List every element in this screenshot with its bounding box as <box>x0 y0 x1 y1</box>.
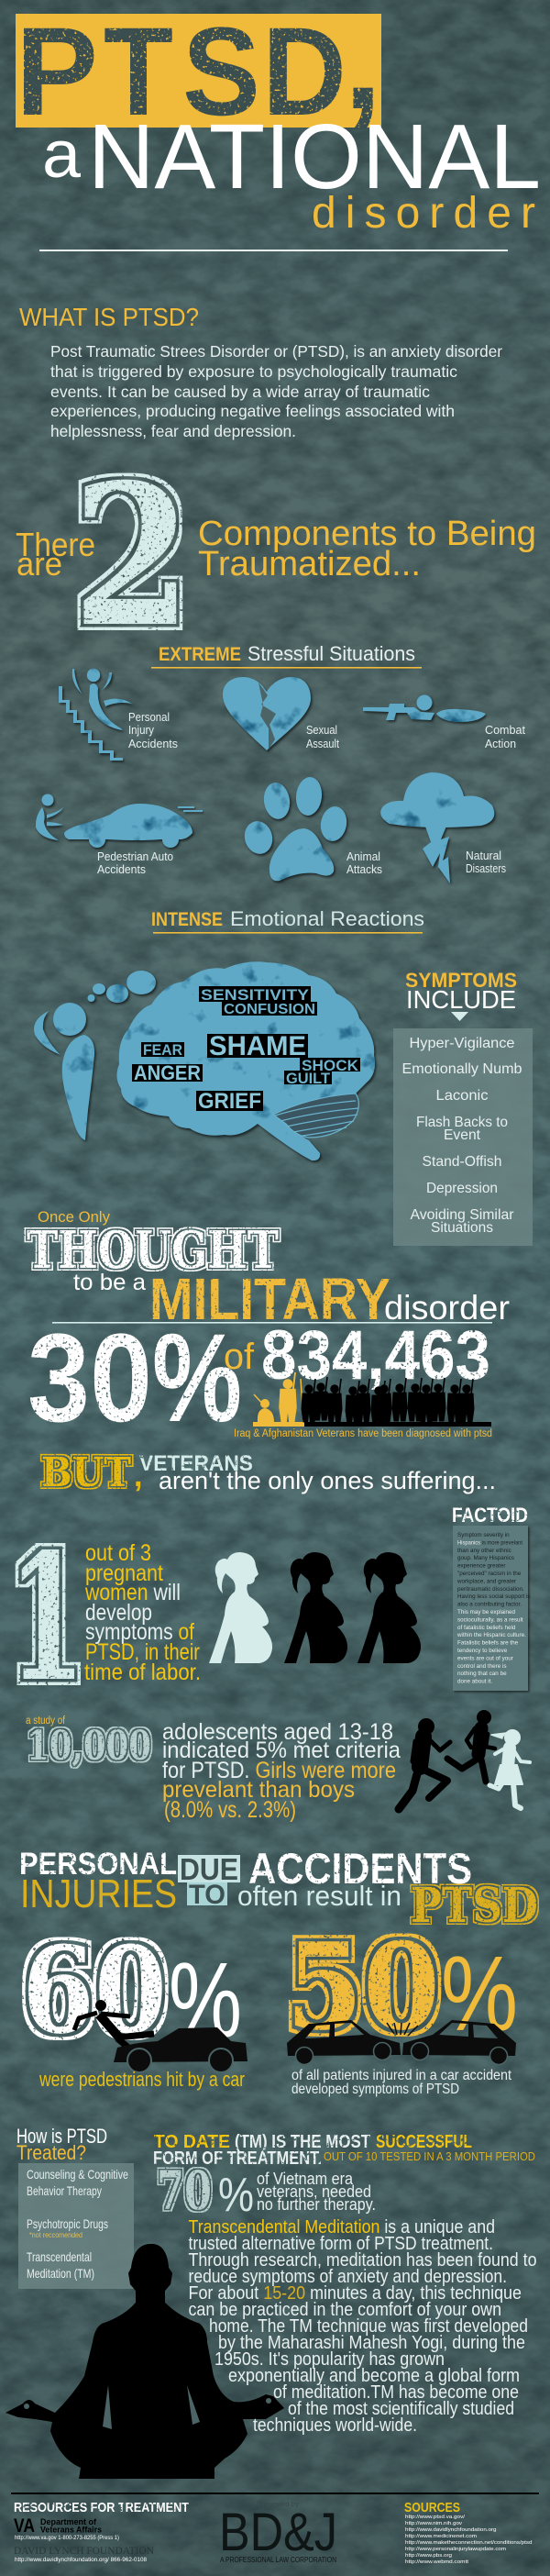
heading: there are 2 components: There <box>16 526 95 563</box>
icon: animal attacks: Animal <box>346 850 380 863</box>
stat: 50 percent: 50 <box>286 1916 440 2057</box>
icon: pedestrian auto accidents: Pedestrian Auto <box>97 850 173 863</box>
panel: treatments: Behavior Therapy <box>27 2183 102 2198</box>
title: disorder: disorder <box>312 189 535 238</box>
stat: 1 out of 3 pregnant women <box>8 1516 201 1720</box>
heading: there are 2 components: Components to Being <box>198 515 536 553</box>
icon: pedestrian auto accidents: Accidents <box>97 863 146 876</box>
icon: natural disasters <box>380 772 506 883</box>
panel: treatments: *not reccomended <box>29 2231 82 2239</box>
text block: transcendental meditation: can be practiced in the comfort of your own <box>189 2300 501 2320</box>
stat: study of 10,000 adolescents: a study of <box>26 1715 66 1727</box>
stat: 30 percent of 834,463: % <box>152 1308 242 1449</box>
panel: symptoms list: Stand-Offish <box>422 1154 502 1170</box>
heading: personal injuries due to accidents often result in PTSD: ACCIDENTS <box>248 1844 472 1893</box>
text block: transcendental meditation: reduce symptoms of anxiety and depression. <box>189 2267 507 2287</box>
heading: what is PTSD: WHAT IS PTSD? <box>19 303 199 331</box>
heading: to date TM is most successful <box>153 2132 472 2169</box>
title: PTSD on yellow block: T <box>104 2 173 142</box>
text block: transcendental meditation: of the most scientifically studied <box>288 2399 514 2419</box>
heading: there are 2 components: Traumatized... <box>198 545 421 583</box>
stat: 70 percent: veterans, needed <box>257 2182 371 2201</box>
icon: sexual assault: Sexual <box>306 724 337 737</box>
panel: factoid: peritraumatic dissociation. <box>457 1586 524 1593</box>
brain label: shock: SHOCK <box>302 1057 359 1074</box>
icon: three pregnant women <box>209 1552 421 1663</box>
footer: sources: http://www.pbs.org <box>405 2553 452 2559</box>
stat: study of 10,000 adolescents: indicated 5% met criteria <box>162 1738 401 1763</box>
panel: factoid <box>453 1526 530 1691</box>
icon: two cars crashing <box>287 2020 516 2064</box>
panel: treatments: Counseling & Cognitive <box>27 2167 128 2182</box>
heading: how is PTSD treated <box>16 2125 107 2164</box>
heading: once only thought to be a military disorder: Once Only <box>38 1208 110 1226</box>
heading: intense emotional reactions <box>151 907 424 934</box>
stat: 1 out of 3 pregnant women: out of 3 <box>85 1540 151 1566</box>
icon: combat action: Action <box>485 738 516 750</box>
panel: factoid: Symptom severity in <box>457 1532 510 1538</box>
heading: but veterans aren't the only ones suffering: BUT <box>41 1449 131 1496</box>
heading: but veterans aren't the only ones suffering: aren't the only ones suffering... <box>159 1467 496 1494</box>
panel: symptoms list: Laconic <box>436 1088 488 1104</box>
brain label: fear: FEAR <box>143 1041 182 1059</box>
heading: personal injuries due to accidents often result in PTSD: PERSONAL <box>19 1847 177 1882</box>
panel: factoid: Fatalistic beliefs are the <box>457 1640 519 1647</box>
heading: to date TM is most successful: SUCCESSFUL <box>376 2132 472 2152</box>
icon: personal injury accidents: Accidents <box>128 738 178 750</box>
panel: factoid: done about it. <box>457 1679 492 1685</box>
heading: symptoms include <box>405 969 517 1021</box>
heading: personal injuries due to accidents often result in PTSD: DUE <box>180 1852 238 1886</box>
heading: personal injuries due to accidents often result in PTSD <box>19 1844 538 1934</box>
heading: once only thought to be a military disorder: disorder <box>384 1289 510 1327</box>
brain label: confusion: CONFUSION <box>224 1002 315 1017</box>
stat: 1 out of 3 pregnant women: time of labor. <box>84 1660 201 1685</box>
text block: definition <box>50 342 502 440</box>
footer: presented by BD&J: BD&J <box>219 2503 337 2562</box>
icon: pedestrian auto accidents <box>36 794 203 876</box>
panel: treatments: Transcendental <box>27 2249 92 2264</box>
heading: once only thought to be a military disorder: MILITARY <box>149 1266 390 1332</box>
brain: cerebellum <box>273 1094 358 1138</box>
text block: transcendental meditation: For about 15-20 minutes a day, this technique <box>189 2283 522 2304</box>
heading: extreme stressful situations <box>151 642 422 669</box>
title: a NATIONAL: a <box>42 118 82 192</box>
stat: 1 out of 3 pregnant women: pregnant <box>85 1560 163 1586</box>
stat: study of 10,000 adolescents: 10,000 <box>27 1723 151 1770</box>
text block: transcendental meditation <box>189 2217 537 2436</box>
footer: presented by BD&J: Presented by <box>257 2500 299 2508</box>
stat: 1 out of 3 pregnant women: 1 <box>8 1516 85 1720</box>
heading: but veterans aren't the only ones suffering <box>41 1449 496 1496</box>
footer: resources for treatment <box>14 2500 189 2563</box>
text block: definition: events. It can be caused by a wide array of traumatic <box>50 383 430 401</box>
panel: treatments: Psychotropic Drugs <box>27 2216 108 2231</box>
panel: factoid: of fatalistic beliefs held <box>457 1625 516 1631</box>
heading: personal injuries due to accidents often result in PTSD: TO <box>189 1880 226 1910</box>
panel: factoid: within the Hispanic culture. <box>456 1632 526 1638</box>
footer: presented by BD&J: A PROFESSIONAL LAW CORPORATION <box>220 2555 336 2564</box>
stat: 1 out of 3 pregnant women: women will <box>84 1580 181 1605</box>
stat: 1 out of 3 pregnant women: symptoms of <box>85 1619 194 1645</box>
stat: study of 10,000 adolescents: (8.0% vs. 2.3%) <box>164 1797 296 1823</box>
panel: symptoms list: Event <box>444 1127 481 1143</box>
runner 1 <box>399 1718 450 1809</box>
panel: factoid: socioculturally, as a result <box>457 1616 523 1623</box>
heading: how is PTSD treated: How is PTSD <box>16 2125 107 2148</box>
stat: 1 out of 3 pregnant women: PTSD, in their <box>85 1639 200 1665</box>
panel: factoid: events are out of your <box>457 1655 513 1661</box>
stat: 70 percent: 70 <box>157 2160 212 2222</box>
stat: study of 10,000 adolescents: for PTSD. Girls were more <box>162 1758 396 1783</box>
footer: sources: http://www.personalinjurylawupdate.com <box>405 2547 506 2552</box>
panel: factoid: control and there is <box>457 1663 507 1670</box>
footer: sources <box>404 2500 532 2565</box>
panel: factoid: goup. Many Hispanics <box>457 1555 514 1561</box>
title: PTSD on yellow block <box>16 0 382 142</box>
icon: sexual assault <box>223 677 339 750</box>
stat: 70 percent: % <box>218 2169 254 2222</box>
heading: personal injuries due to accidents often result in PTSD: often result in <box>237 1880 402 1912</box>
stat: 70 percent: no further therapy. <box>257 2195 376 2214</box>
caption: car accident patients: of all patients injured in a car accident <box>292 2068 512 2083</box>
stat: study of 10,000 adolescents <box>26 1715 401 1823</box>
icon: natural disasters: Disasters <box>466 862 506 875</box>
icon: running children <box>399 1710 530 1809</box>
caption: car accident patients <box>292 2068 512 2097</box>
icon: meditating silhouette <box>6 2244 284 2479</box>
panel: treatments: Meditation (TM) <box>27 2266 94 2281</box>
stat: 60 percent: 60 <box>22 1920 167 2060</box>
icon: sexual assault: Assault <box>306 738 339 750</box>
panel: symptoms list: Emotionally Numb <box>402 1061 522 1077</box>
logo: veterans affairs: VA <box>14 2515 35 2537</box>
icon: animal attacks <box>241 776 382 881</box>
logo: veterans affairs: Veterans Affairs <box>40 2525 102 2536</box>
panel: factoid: experience greater <box>457 1563 506 1570</box>
footer: resources for treatment: RESOURCES FOR TREATMENT <box>14 2500 189 2515</box>
runner 3: girl <box>490 1729 530 1808</box>
stat: 70 percent: of Vietnam era <box>257 2170 354 2188</box>
logo: veterans affairs: Department of <box>40 2517 97 2527</box>
footer: resources for treatment: DAVID LYNCH FOUNDATION <box>14 2544 154 2557</box>
stat: 50 percent: % <box>441 1934 518 2053</box>
footer: sources: http://www.ptsd.va.gov/ <box>405 2515 466 2520</box>
text block: transcendental meditation: 1950s. It's popularity has grown <box>214 2349 445 2370</box>
footer: sources: http://www.medicinenet.com <box>405 2534 477 2539</box>
panel: factoid: also a contributing factor. <box>457 1602 522 1608</box>
panel: factoid: nothing that can be <box>457 1671 507 1677</box>
brain label: guilt: GUILT <box>286 1070 331 1087</box>
heading: how is PTSD treated: Treated? <box>16 2141 86 2164</box>
stat: 1 out of 3 pregnant women: develop <box>85 1600 152 1626</box>
stat: 60 percent: % <box>169 1940 242 2060</box>
brain label: sensitivity: SENSITIVITY <box>201 986 310 1004</box>
heading: extreme stressful situations: EXTREME <box>159 644 241 665</box>
heading: to date TM is most successful: TO DATE <box>154 2132 230 2152</box>
runner 2 <box>447 1710 495 1782</box>
stat: 30 percent of 834,463: 30 <box>28 1308 152 1449</box>
stat: 30 percent of 834,463: of <box>224 1337 255 1377</box>
text block: transcendental meditation: trusted alternative form of PTSD treatment. <box>189 2234 493 2254</box>
logo: veterans affairs <box>14 2515 102 2537</box>
icon: natural disasters: Natural <box>466 849 501 862</box>
panel: symptoms list: Situations <box>431 1220 493 1236</box>
footer: sources: http://www.webmd.comtt <box>405 2559 469 2565</box>
footer: sources: SOURCES <box>404 2500 460 2515</box>
icon: animal attacks: Attacks <box>346 863 382 876</box>
icon: pedestrian hit by car <box>74 2000 248 2072</box>
icon: personal injury accidents <box>59 669 178 761</box>
panel: symptoms list <box>393 1028 533 1246</box>
panel: symptoms list: Hyper-Vigilance <box>409 1036 515 1051</box>
footer: sources: http://www.davidlynchfoundation.org <box>405 2527 497 2533</box>
footer: sources: http://www.maketheconnection.net/conditions/ptsd <box>405 2540 532 2546</box>
caption: car accident patients: developed symptoms of PTSD <box>292 2082 459 2097</box>
stat: 30 percent of 834,463: 834,463 <box>261 1316 490 1394</box>
silhouette head over panel <box>102 2244 200 2324</box>
title: PTSD on yellow block: D <box>262 2 346 142</box>
brain label: shame: SHAME <box>209 1031 306 1061</box>
brain with emotion labels <box>116 961 375 1160</box>
icon: combat action: Combat <box>485 724 526 737</box>
heading: once only thought to be a military disorder: to be a <box>73 1270 146 1295</box>
heading: symptoms include: INCLUDE <box>406 985 516 1014</box>
caption: veterans diagnosed: Iraq & Afghanistan Veterans have been diagnosed with ptsd <box>234 1428 492 1439</box>
panel: symptoms list: Depression <box>426 1181 498 1196</box>
factoid heading: FACTOID <box>452 1504 528 1527</box>
caption: pedestrians: were pedestrians hit by a car <box>38 2068 245 2091</box>
panel: factoid: "perceived" racism in the <box>457 1571 522 1577</box>
title: PTSD on yellow block: P <box>16 2 98 142</box>
text block: definition: helplessness, fear and depression. <box>50 422 296 440</box>
panel: symptoms list: Avoiding Similar <box>411 1207 514 1223</box>
text block: definition: that is triggered by exposure to psychologically traumatic <box>50 362 457 381</box>
text block: definition: Post Traumatic Strees Disorder or (PTSD), is an anxiety disorder <box>50 342 502 361</box>
heading: but veterans aren't the only ones suffering: VETERANS <box>139 1451 253 1476</box>
heading: once only thought to be a military disorder <box>27 1208 510 1332</box>
stat: study of 10,000 adolescents: adolescents aged 13-18 <box>162 1719 393 1745</box>
heading: personal injuries due to accidents often result in PTSD: INJURIES <box>20 1871 177 1916</box>
title: PTSD on yellow block: S <box>182 2 260 142</box>
heading: to date TM is most successful: (TM) IS THE MOST <box>235 2132 370 2152</box>
brain label: anger: ANGER <box>134 1061 201 1084</box>
text block: transcendental meditation: Transcendental Meditation is a unique and <box>189 2217 495 2237</box>
icon: personal injury accidents: Injury <box>128 724 155 737</box>
text block: transcendental meditation: techniques world-wide. <box>253 2415 417 2436</box>
title: a NATIONAL: NATIONAL <box>88 105 541 208</box>
panel: factoid: Having less social support is <box>457 1593 530 1600</box>
text block: definition: experiences, producing negative feelings associated with <box>50 402 455 420</box>
stat: study of 10,000 adolescents: prevelant than boys <box>162 1777 355 1803</box>
heading: intense emotional reactions: INTENSE <box>151 909 223 930</box>
icon: person thinking <box>34 971 156 1140</box>
stat: 30 percent of 834,463 <box>28 1308 490 1449</box>
heading: symptoms include: SYMPTOMS <box>405 969 517 992</box>
heading: there are 2 components <box>16 441 536 670</box>
panel: factoid: This may be explained <box>457 1609 516 1616</box>
heading: once only thought to be a military disorder: THOUGHT <box>27 1220 279 1281</box>
footer: resources for treatment: http://www.davidlynchfoundation.org/ 866-962-0108 <box>15 2558 148 2563</box>
icon: personal injury accidents: Personal <box>128 711 170 724</box>
panel: treatments <box>18 2163 134 2289</box>
heading: intense emotional reactions: Emotional Reactions <box>230 907 424 930</box>
panel: factoid: Hispanics is more prevelant <box>457 1539 522 1546</box>
text block: transcendental meditation: of meditation.TM has become one <box>273 2382 519 2403</box>
icon: combat action <box>363 695 526 750</box>
text block: transcendental meditation: exponentially and become a global form <box>228 2366 520 2386</box>
stat: 70 percent <box>157 2160 376 2222</box>
footer: resources for treatment: http://www.va.gov 1-800-273-8255 (Press 1) <box>15 2536 119 2541</box>
footer: sources: http://www.nim.nih.gov <box>405 2521 462 2526</box>
panel: symptoms list: Flash Backs to <box>416 1115 508 1130</box>
heading: but veterans aren't the only ones suffering: , <box>134 1459 142 1493</box>
brain label: grief: GRIEF <box>198 1089 261 1114</box>
panel: factoid: workplace, and greater <box>456 1578 516 1584</box>
panel: factoid: tendency to believe <box>457 1648 508 1654</box>
heading: there are 2 components: 2 <box>72 441 192 670</box>
heading: there are 2 components: are <box>16 545 62 583</box>
heading: extreme stressful situations: Stressful Situations <box>248 642 415 665</box>
panel: factoid: than any other ethnic <box>457 1548 512 1554</box>
icon: soldiers silhouette <box>253 1372 491 1427</box>
heading: to date TM is most successful: FORM OF TREATMENT. <box>153 2149 322 2169</box>
